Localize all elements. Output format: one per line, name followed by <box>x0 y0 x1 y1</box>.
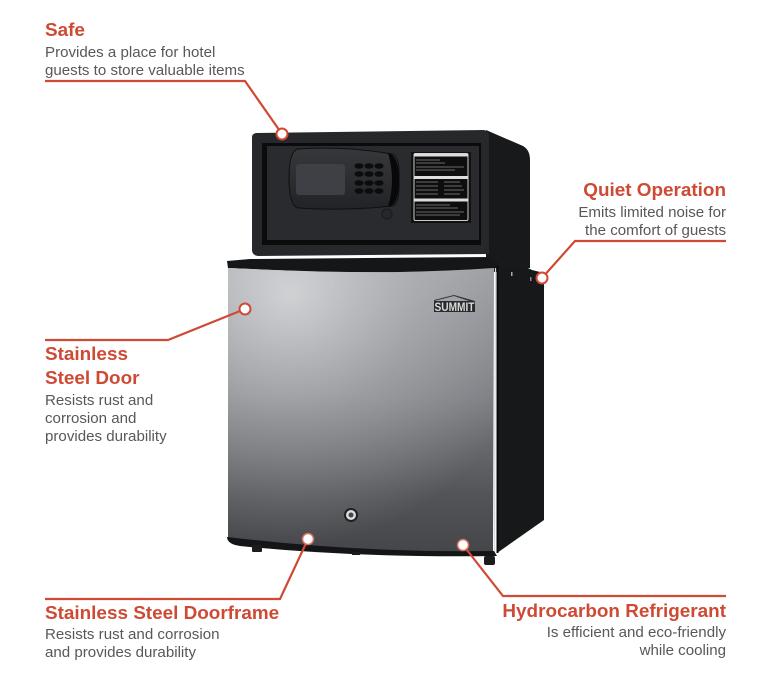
fridge top edge <box>227 257 498 272</box>
fridge feet <box>252 545 495 565</box>
description: Stainless Steel Door: provides durability <box>45 428 167 445</box>
text block: Safe <box>45 20 245 79</box>
heading: Safe: Safe <box>45 20 85 41</box>
safe door <box>262 143 481 245</box>
description: Stainless Steel Doorframe: and provides durability <box>45 644 196 661</box>
heading: Hydrocarbon Refrigerant: Hydrocarbon Refrigerant <box>502 601 726 622</box>
text block: Stainless Steel Door <box>45 344 167 445</box>
description: Hydrocarbon Refrigerant: while cooling <box>640 642 726 659</box>
description: Stainless Steel Door: corrosion and <box>45 410 136 427</box>
door lock <box>344 508 358 522</box>
description: Safe: Provides a place for hotel <box>45 44 215 61</box>
text block: Stainless Steel Doorframe <box>45 603 279 661</box>
description: Quiet Operation: Emits limited noise for <box>578 204 726 221</box>
fridge door bottom frame <box>227 537 497 556</box>
description: Stainless Steel Door: Resists rust and <box>45 392 153 409</box>
description: Hydrocarbon Refrigerant <box>547 624 726 659</box>
heading: Stainless Steel Door: Stainless <box>45 344 128 365</box>
description: Stainless Steel Doorframe <box>45 626 220 661</box>
heading: Stainless Steel Door <box>45 344 140 389</box>
safe instruction label <box>411 152 471 223</box>
Summit logo: SUMMIT <box>434 302 474 314</box>
safe override button <box>382 209 392 219</box>
description: Quiet Operation: the comfort of guests <box>585 222 726 239</box>
description: Safe <box>45 44 245 79</box>
heading: Stainless Steel Door: Steel Door <box>45 368 139 389</box>
safe side <box>486 130 530 268</box>
fridge side <box>497 258 544 553</box>
callout line: Stainless Steel Doorframe <box>45 534 314 599</box>
description: Safe: guests to store valuable items <box>45 62 245 79</box>
description: Hydrocarbon Refrigerant: Is efficient and eco-friendly <box>547 624 726 641</box>
callout line: Stainless Steel Door <box>45 304 250 340</box>
callout line: Safe <box>45 81 288 140</box>
fridge door <box>228 266 498 553</box>
description: Quiet Operation <box>578 204 726 239</box>
description: Stainless Steel Doorframe: Resists rust and corrosion <box>45 626 220 643</box>
text block: Quiet Operation <box>578 180 726 239</box>
text block: Hydrocarbon Refrigerant <box>502 601 726 659</box>
callout line: Hydrocarbon Refrigerant <box>458 540 726 596</box>
safe keypad <box>289 148 399 209</box>
description: Stainless Steel Door <box>45 392 167 445</box>
Summit logo <box>434 295 475 314</box>
heading: Stainless Steel Doorframe: Stainless Steel Doorframe <box>45 603 279 624</box>
heading: Quiet Operation: Quiet Operation <box>583 180 726 201</box>
keypad buttons <box>354 163 384 194</box>
safe front <box>252 130 489 256</box>
keypad display <box>296 164 345 195</box>
callout line: Quiet Operation <box>536 241 726 284</box>
